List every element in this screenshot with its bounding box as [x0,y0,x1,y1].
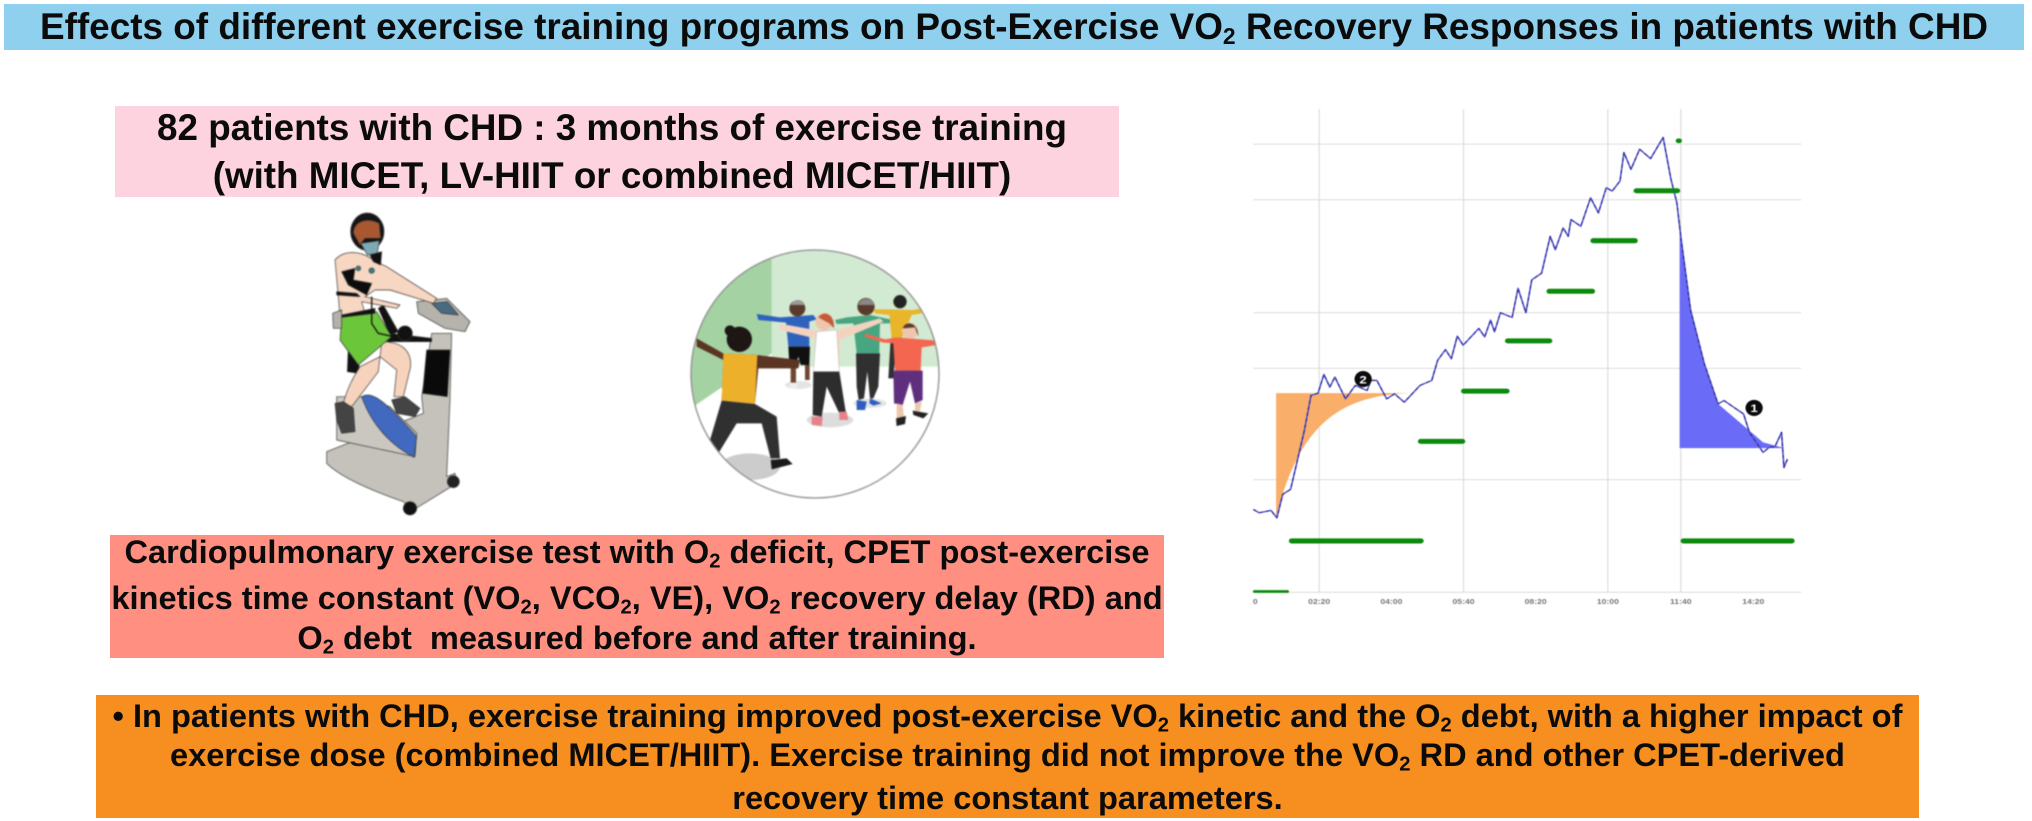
time axis labels: 10:00 [1597,597,1619,606]
panel: measurements: Cardiopulmonary exercise test with O2 deficit, CPET post-exercise [124,533,1150,572]
panel: measurements [110,535,1164,658]
time axis labels: 0 [1253,597,1258,606]
time axis labels [1253,597,1765,606]
green shirt person [835,315,893,353]
marker 1: 1 [1750,402,1758,415]
time axis labels: 04:00 [1380,597,1403,606]
panel: measurements: kinetics time constant (VO2, VCO2, VE), VO2 recovery delay (RD) and [111,579,1163,618]
panel: conclusion: • In patients with CHD, exercise training improved post-exercise VO2 kinetic and the O2 debt, with a higher impact of [113,697,1902,736]
workload steps [1255,141,1792,592]
panel: conclusion: recovery time constant parameters. [732,779,1283,816]
panel: conclusion [96,695,1919,818]
time axis labels: 11:40 [1670,597,1692,606]
panel: conclusion: exercise dose (combined MICET/HIIT). Exercise training did not improve the VO2 RD and other CPET-derived [170,736,1845,775]
marker 2 [1355,371,1372,387]
title: Effects of different exercise training programs on Post-Exercise VO2 Recovery Responses in patients with CHD [40,6,1988,49]
chart: VO2 kinetics during and after exercise [1252,109,1802,606]
marker 2: 2 [1359,373,1367,386]
blue shirt person [757,314,817,347]
red shirt person [865,333,937,372]
VO2 line [1253,137,1787,518]
marker 1 [1745,400,1763,416]
O2 debt area [1680,233,1785,448]
time axis labels: 02:20 [1308,597,1331,606]
panel: study population [115,106,1119,197]
time axis labels: 14:20 [1742,597,1765,606]
icon: patient on exercise bike with gas mask [325,212,472,516]
panel: measurements: O2 debt measured before and after training. [297,619,977,658]
O2 deficit area [1276,393,1416,518]
time axis labels: 08:20 [1525,597,1547,606]
yellow shirt person [873,308,922,338]
time axis labels: 05:40 [1453,597,1475,606]
white top person [778,318,884,364]
panel: study population: 82 patients with CHD : 3 months of exercise training [157,107,1067,148]
panel: study population: (with MICET, LV-HIIT or combined MICET/HIIT) [213,155,1011,196]
instructor [697,338,800,403]
icon: group exercise class in circle [690,248,940,500]
